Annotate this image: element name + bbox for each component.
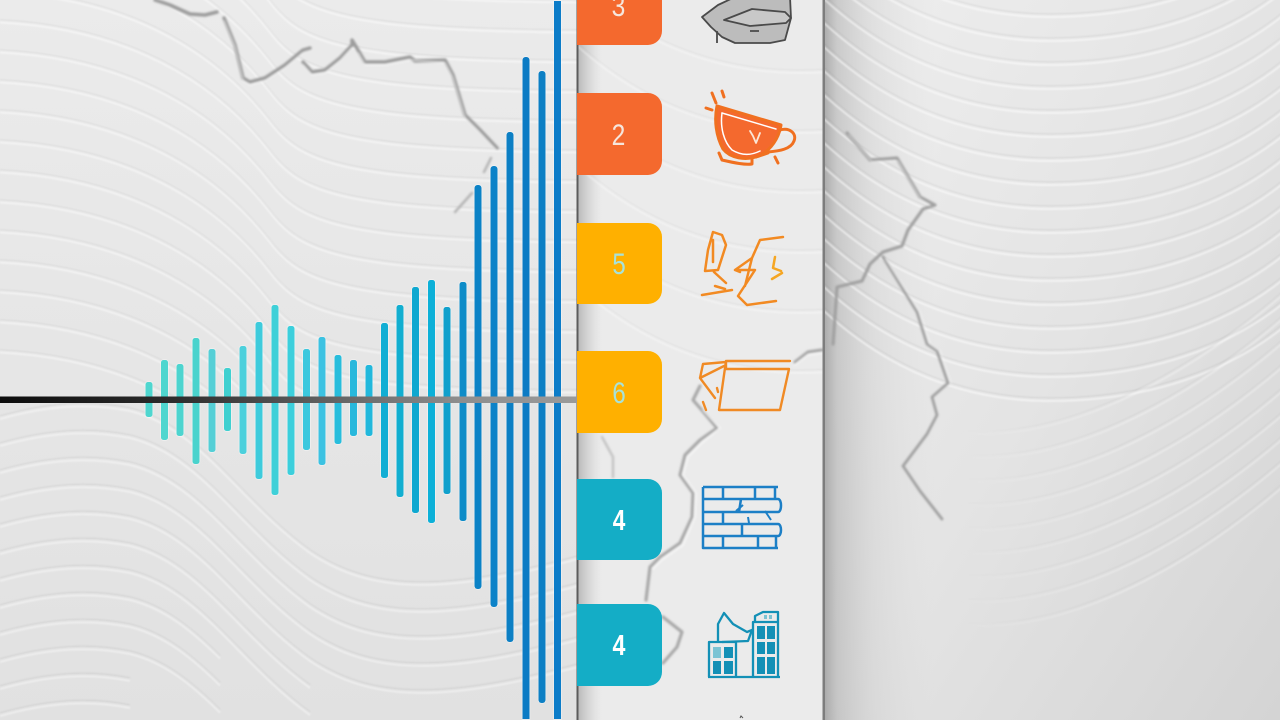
icon: folded box xyxy=(700,361,790,410)
tile: number 6 xyxy=(577,351,662,433)
tile: number 4 lower xyxy=(577,604,662,686)
waveform axis line xyxy=(0,396,577,403)
panel left edge xyxy=(576,0,578,720)
panel left inner shadow xyxy=(578,0,602,720)
tile: number 5: 5 xyxy=(612,246,626,281)
waveform chart xyxy=(146,1,561,719)
tile: number 5 xyxy=(577,223,662,304)
crack: top left wall xyxy=(155,0,497,212)
tile: number 2: 2 xyxy=(612,118,625,152)
tile: number 2 xyxy=(577,93,662,175)
icon: coffee cup xyxy=(706,91,795,164)
background: left textured wall xyxy=(0,0,578,720)
tile: number 4 upper xyxy=(577,479,662,560)
tile: number 3 xyxy=(577,0,662,45)
icon: cracked scribble xyxy=(702,232,783,305)
tile: number 6: 6 xyxy=(612,375,626,410)
center panel xyxy=(576,0,825,720)
background: right wall panel shadow xyxy=(824,0,934,720)
icon: clothes iron xyxy=(702,0,791,43)
background: right textured wall xyxy=(824,0,1280,720)
tile: number 4 lower: 4 xyxy=(613,628,626,662)
icon: cracked brick wall xyxy=(703,487,781,548)
tile: number 4 upper: 4 xyxy=(613,503,626,537)
crack: right wall xyxy=(833,133,951,519)
crack: panel center xyxy=(602,350,822,663)
panel right edge xyxy=(822,0,825,720)
bottom cut-off icon mark xyxy=(740,716,743,718)
icon: damaged buildings xyxy=(708,612,780,677)
